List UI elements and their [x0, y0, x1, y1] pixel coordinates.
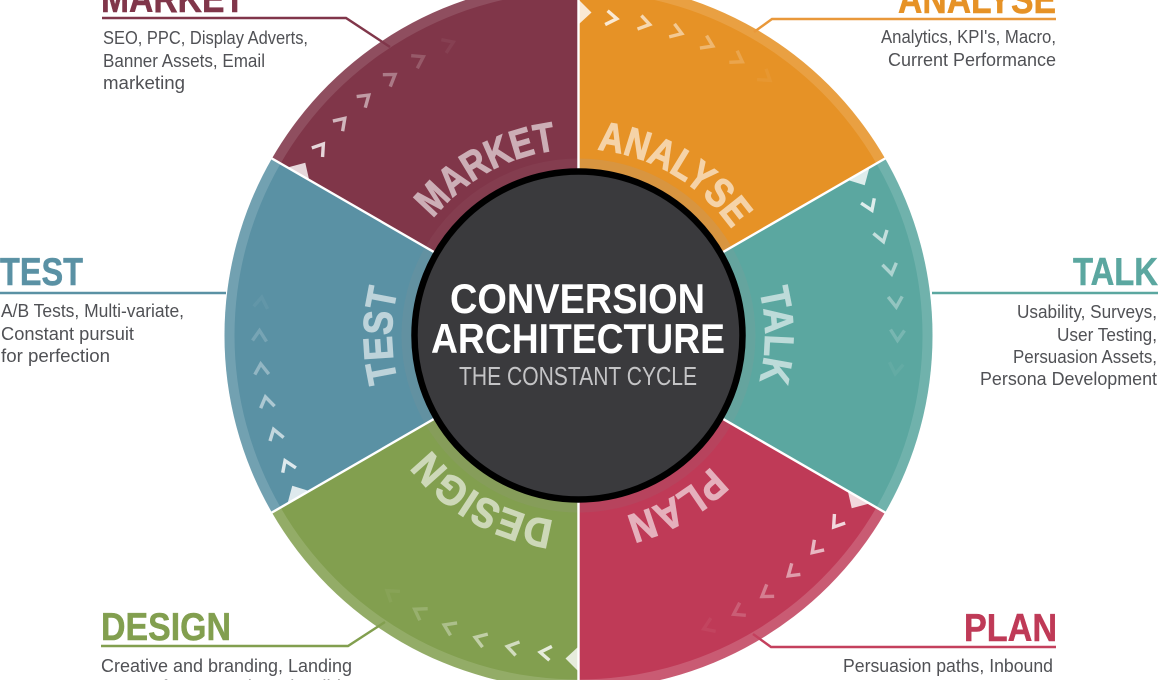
callout: market: marketing	[103, 73, 185, 93]
title: CONVERSION	[450, 275, 705, 322]
chevrons: design	[383, 585, 552, 660]
chevrons: plan	[697, 483, 846, 667]
icon: market direction marker	[288, 156, 316, 180]
callout: talk: User Testing,	[1057, 325, 1157, 345]
panel: test segment	[119, 70, 578, 512]
callout: plan	[753, 607, 1057, 676]
wheel	[224, 0, 932, 680]
segment label: test	[363, 284, 396, 386]
callout: talk: Usability, Surveys,	[1017, 302, 1157, 322]
chevrons: analyse	[605, 11, 774, 86]
icon: talk direction marker	[848, 168, 876, 191]
callout: talk: Persona Development	[980, 369, 1157, 389]
chevrons: market	[311, 4, 460, 188]
segment label: market: MARKET	[412, 122, 553, 218]
callout: plan: Persuasion paths, Inbound	[843, 656, 1053, 676]
panel: analyse segment	[578, 0, 885, 336]
segment label: design: DESIGN	[410, 450, 552, 549]
panel: design segment	[272, 336, 578, 680]
callout: design	[101, 606, 385, 680]
callout: market	[101, 0, 390, 93]
callout: test: for perfection	[1, 346, 110, 366]
callout: design: Creative and branding, Landing	[101, 656, 352, 676]
segment label: analyse: ANALYSE	[598, 122, 754, 228]
callout: market: SEO, PPC, Display Adverts,	[103, 28, 308, 48]
callout: analyse: Analytics, KPI's, Macro,	[881, 27, 1056, 47]
centre hub	[414, 172, 742, 500]
panel: plan segment	[425, 336, 885, 680]
callout: analyse	[754, 0, 1056, 70]
callout: market: Banner Assets, Email	[103, 51, 265, 71]
callout: test	[0, 251, 226, 366]
icon: plan direction marker	[841, 491, 869, 515]
segment label: test: TEST	[363, 284, 396, 386]
callout: test: Constant pursuit	[1, 324, 134, 344]
callout: plan: PLAN	[964, 607, 1057, 650]
icon: analyse direction marker	[578, 0, 592, 24]
segment label: talk: TALK	[759, 284, 794, 386]
icon: test direction marker	[281, 480, 309, 504]
callout: design: DESIGN	[101, 606, 231, 649]
panel: market segment	[272, 0, 732, 336]
subtitle: THE CONSTANT CYCLE	[459, 363, 697, 391]
segment label: plan: PLAN	[628, 468, 729, 543]
title: ARCHITECTURE	[431, 315, 725, 362]
callout: analyse: Current Performance	[888, 50, 1056, 70]
callout: talk	[932, 251, 1158, 389]
chevrons: talk	[808, 196, 958, 380]
callout: test: A/B Tests, Multi-variate,	[1, 301, 184, 321]
title	[431, 275, 725, 362]
callout: test: TEST	[0, 251, 83, 294]
icon: design direction marker	[566, 646, 578, 672]
segment label: talk	[759, 284, 794, 386]
panel: talk segment	[578, 158, 1038, 601]
chevrons: test	[199, 291, 349, 475]
